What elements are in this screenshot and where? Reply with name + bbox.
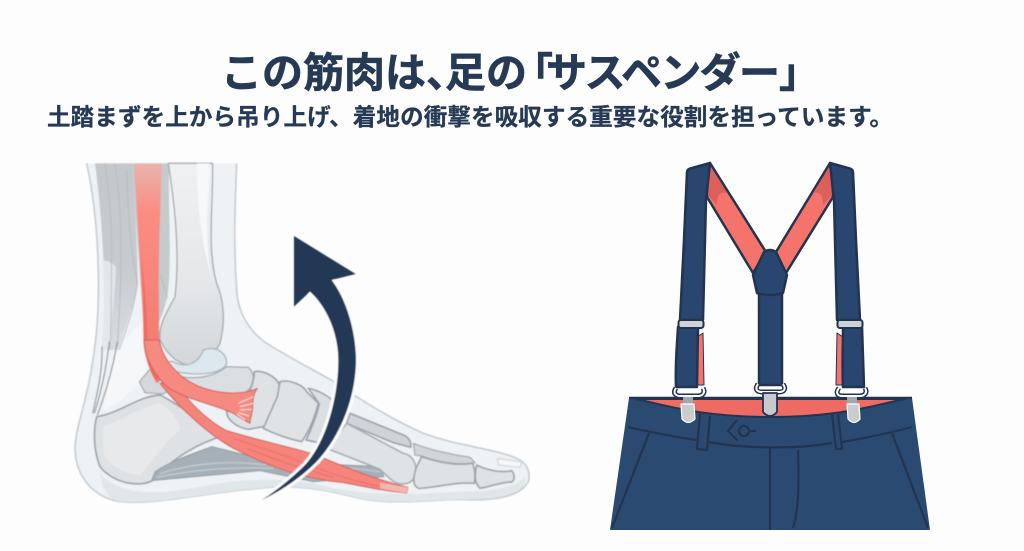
- illustration: suspenders and trousers: [610, 163, 930, 530]
- calf muscle inner: [132, 163, 170, 327]
- tarsal bones: [227, 371, 279, 429]
- inner leg white area: [103, 320, 147, 410]
- tendon branch: fan to navicular: [144, 340, 257, 423]
- title: 「: [512, 50, 553, 96]
- right pink back strap: [776, 163, 833, 273]
- strap shadow areas: [708, 166, 832, 205]
- tendon darker stripe: [140, 240, 160, 380]
- bone highlight: [197, 163, 213, 283]
- calf fibres: [105, 163, 167, 350]
- illustration: foot anatomy with tendons: [75, 163, 529, 502]
- centre clip: [756, 384, 785, 416]
- tibia bone: [160, 163, 223, 366]
- Y junction knot: [753, 250, 787, 295]
- left clip: [675, 388, 704, 422]
- centre strap: [759, 294, 782, 385]
- calcaneus heel bone: [94, 395, 220, 484]
- plantar tendon highlights: [233, 438, 405, 490]
- left adjuster buckle: [678, 320, 704, 328]
- metatarsal bones: [347, 413, 411, 447]
- calf highlight: [101, 260, 116, 350]
- calcaneus shading: [103, 403, 180, 475]
- inner sole band: [100, 473, 525, 502]
- shin tendon: [134, 163, 170, 383]
- trouser seams: [612, 414, 928, 530]
- foot skin fill: [75, 163, 529, 502]
- right adjuster buckle: [838, 320, 862, 328]
- curved arrow with halo: [262, 236, 356, 500]
- subtitle: 土踏まずを上から吊り上げ、着地の衝撃を吸収する重要な役割を担っています。: [47, 104, 893, 130]
- toe bones: [413, 443, 475, 464]
- foot skin outline: [75, 163, 529, 502]
- right navy strap: [830, 163, 860, 320]
- trousers: [610, 398, 930, 530]
- title: サスペンダー: [546, 50, 780, 96]
- plantar tendon end: [380, 483, 408, 493]
- talus bone: [167, 349, 227, 374]
- left navy strap: [680, 163, 710, 320]
- ankle tendon lines: [93, 342, 117, 415]
- tendon branch: lateral to plantar: [160, 382, 408, 493]
- toenail: [497, 458, 522, 467]
- title: 」: [779, 50, 820, 96]
- plantar muscle: [152, 447, 384, 482]
- waistband opening: [636, 399, 905, 417]
- left pink back strap: [707, 163, 766, 273]
- title: 足の: [445, 50, 527, 96]
- lower strap pink lining: [697, 333, 843, 385]
- fan white streaks: [237, 397, 253, 420]
- right clip: [837, 388, 866, 422]
- title: この筋肉は、: [221, 50, 467, 96]
- calf muscle back: [95, 163, 138, 350]
